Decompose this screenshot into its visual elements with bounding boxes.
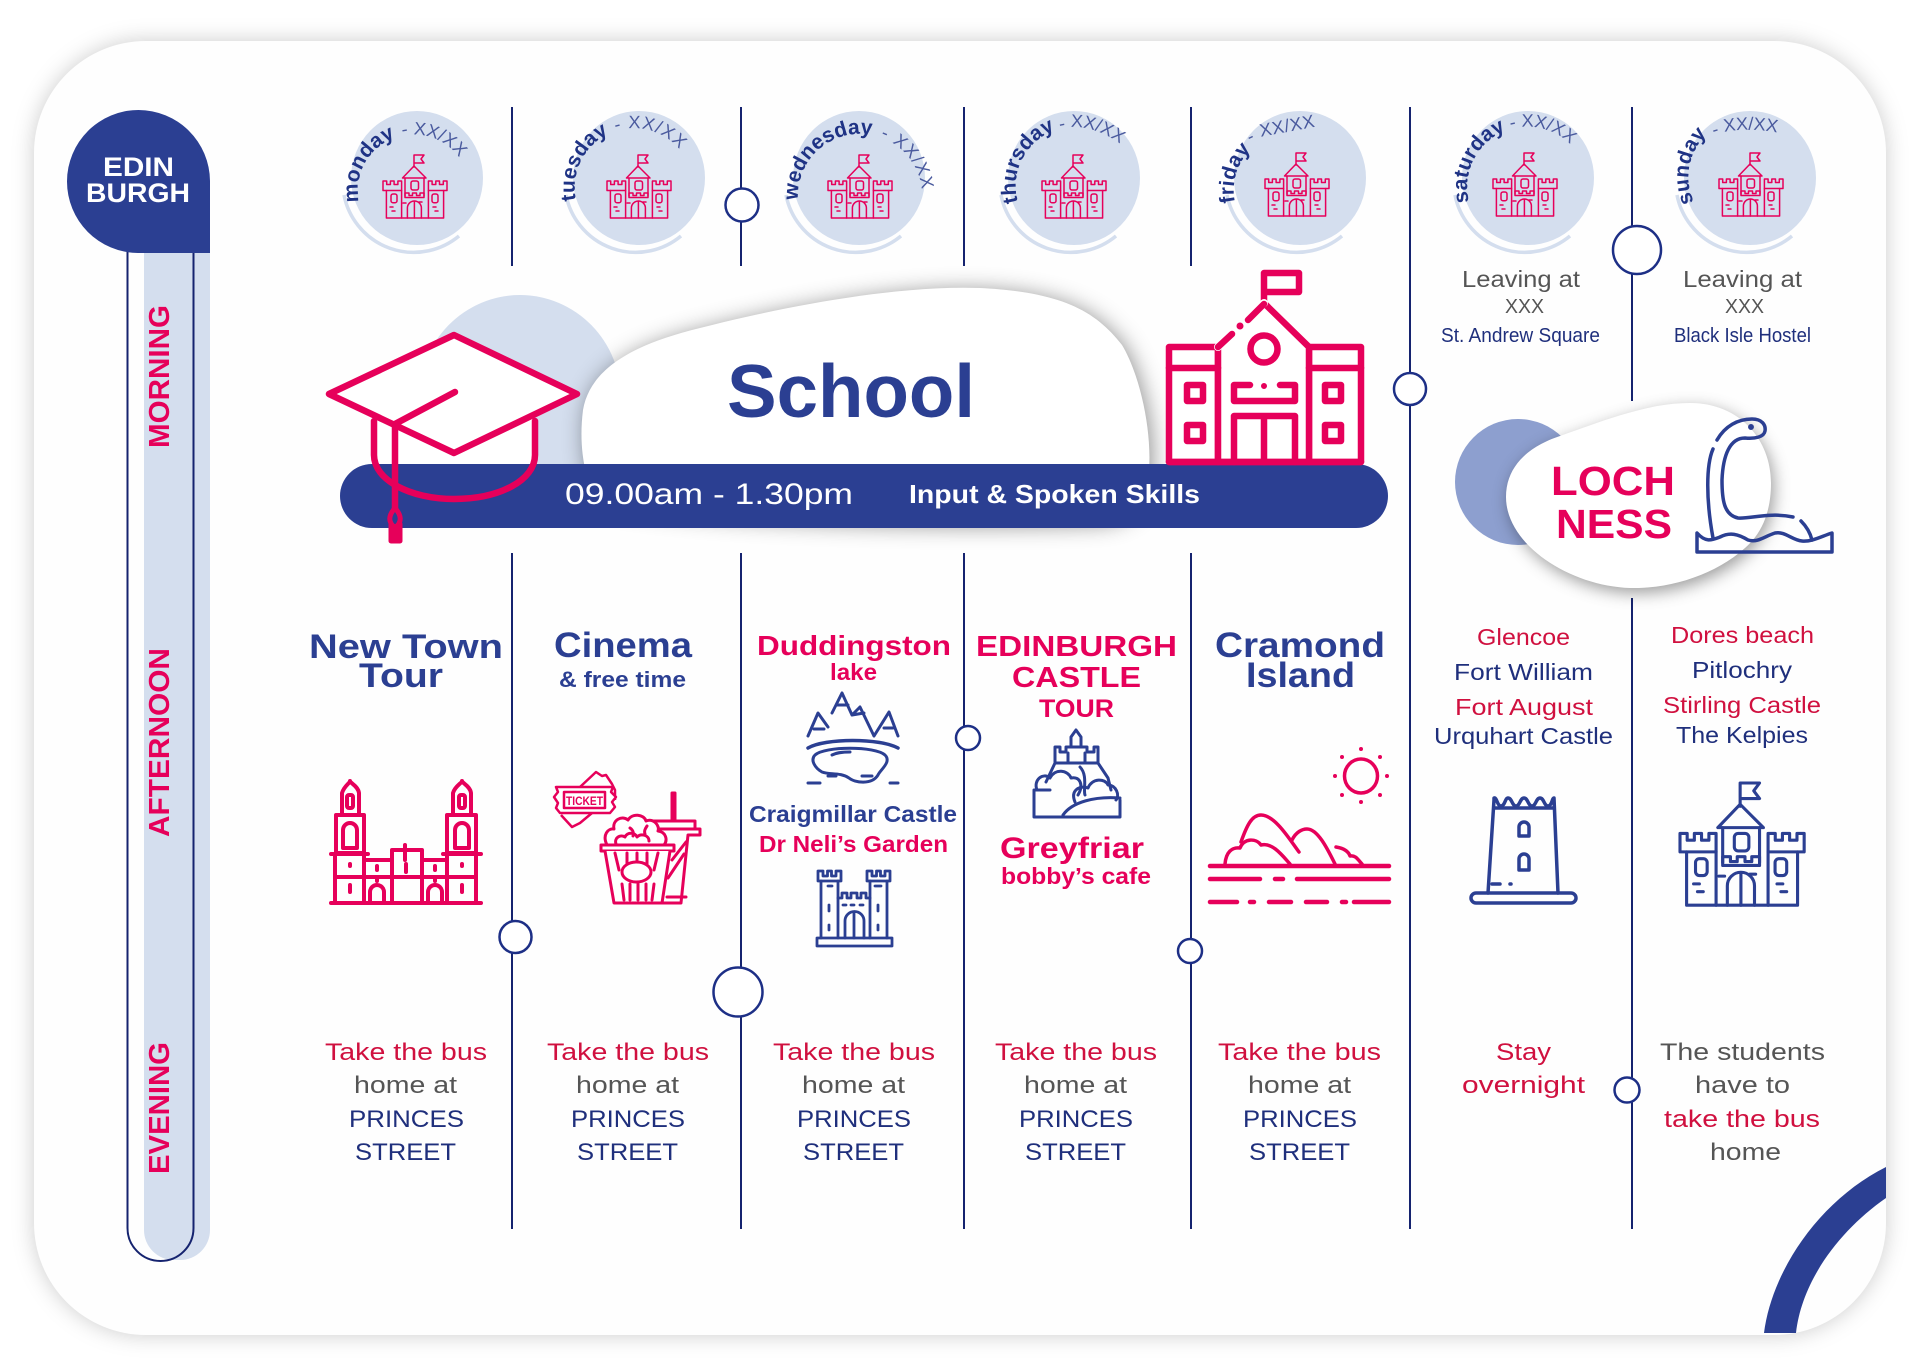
evening text: wednesday: [773, 1039, 935, 1166]
evening text: thursday: home at: [1024, 1072, 1127, 1099]
evening text: saturday: Stay: [1496, 1039, 1551, 1066]
school blob: [581, 288, 1149, 524]
day badge: wednesday: - XX/XX: [882, 132, 934, 189]
heading: Loch Ness: LOCH: [1551, 458, 1675, 504]
label: evening: EVENING: [144, 1042, 176, 1174]
day badge: sunday: [1675, 111, 1816, 254]
evening text: thursday: [995, 1039, 1157, 1166]
column: Edinburgh Castle: TOUR: [1039, 695, 1114, 723]
sunday departure text: [1674, 266, 1811, 347]
icon: island hills and water: [1210, 815, 1389, 902]
evening text: wednesday: PRINCES: [797, 1106, 911, 1133]
evening text: sunday: The students: [1660, 1039, 1825, 1066]
column: New Town Tour: New Town: [309, 628, 503, 666]
column: Edinburgh Castle: CASTLE: [1012, 662, 1141, 694]
column: New Town Tour: Tour: [359, 657, 443, 695]
icon: Nessie: [1697, 419, 1832, 552]
icon: castle: [1680, 783, 1804, 905]
column: Sunday destinations: [1663, 622, 1821, 905]
panel: Loch Ness: [1455, 403, 1832, 588]
city badge: Edinburgh: [67, 110, 210, 253]
column: Duddingston and Craigmillar: Duddingston: [757, 630, 951, 661]
evening text: saturday: [1462, 1039, 1585, 1099]
saturday departure text: St. Andrew Square: [1441, 325, 1600, 347]
icon: tickets: [554, 772, 616, 827]
column: Saturday destinations: [1434, 624, 1613, 903]
evening text: sunday: have to: [1695, 1072, 1790, 1099]
icon: graduation cap: [329, 335, 577, 541]
column: Sunday destinations: Pitlochry: [1692, 657, 1793, 683]
label: afternoon: AFTERNOON: [144, 648, 176, 837]
day badge: saturday: - XX/XX: [1510, 114, 1578, 144]
evening text: monday: PRINCES: [349, 1106, 464, 1133]
evening text: sunday: take the bus: [1664, 1106, 1820, 1133]
column: Cramond Island: Island: [1246, 656, 1355, 695]
timeline nodes: [500, 188, 1661, 1102]
evening text: wednesday: home at: [802, 1072, 905, 1099]
column: Saturday destinations: Fort William: [1454, 659, 1593, 685]
day badge: saturday: saturday: [1454, 120, 1502, 202]
sunday departure text: Leaving at: [1683, 266, 1803, 292]
column: Sunday destinations: Stirling Castle: [1663, 692, 1821, 718]
evening text: friday: PRINCES: [1243, 1106, 1357, 1133]
pale circle behind cap: [419, 295, 621, 501]
day badge: tuesday: tuesday: [562, 124, 606, 202]
column: Duddingston and Craigmillar: Dr Neli’s Garden: [759, 831, 948, 857]
evening text: monday: STREET: [355, 1139, 456, 1166]
column: Duddingston and Craigmillar: lake: [830, 659, 877, 685]
city badge: Edinburgh: BURGH: [86, 178, 190, 208]
evening text: friday: [1218, 1039, 1381, 1166]
column: Cinema: & free time: [559, 667, 686, 692]
evening text: tuesday: PRINCES: [571, 1106, 685, 1133]
evening text: thursday: Take the bus: [995, 1039, 1157, 1066]
day badge: monday: [342, 111, 483, 254]
day badge: thursday: [999, 111, 1140, 254]
column: Sunday destinations: Dores beach: [1671, 622, 1814, 648]
column divider lines: [512, 107, 1632, 1229]
evening text: sunday: home: [1710, 1139, 1781, 1166]
column: Saturday destinations: Fort August: [1455, 694, 1594, 720]
column: Cinema: Cinema: [554, 626, 693, 665]
icon: tickets: TICKET: [566, 794, 604, 808]
icon: tower: [1471, 798, 1576, 903]
evening text: tuesday: STREET: [577, 1139, 678, 1166]
saturday departure text: [1441, 266, 1600, 347]
day badge: tuesday: [562, 111, 705, 254]
column: Edinburgh Castle: bobby’s cafe: [1001, 863, 1151, 889]
evening text: tuesday: Take the bus: [547, 1039, 709, 1066]
evening text: thursday: STREET: [1025, 1139, 1126, 1166]
school bar: [340, 464, 1388, 528]
sunday departure text: Black Isle Hostel: [1674, 325, 1811, 347]
evening text: saturday: overnight: [1462, 1072, 1585, 1099]
label: morning: MORNING: [144, 305, 176, 448]
day badge: monday: monday: [346, 127, 392, 202]
evening text: friday: STREET: [1249, 1139, 1350, 1166]
evening text: sunday: [1660, 1039, 1825, 1166]
icon: castle on rock: [1034, 730, 1120, 817]
icon: school building: [1169, 273, 1361, 462]
evening text: thursday: PRINCES: [1019, 1106, 1133, 1133]
column: Saturday destinations: Urquhart Castle: [1434, 723, 1613, 749]
column: Cinema: [554, 626, 700, 903]
column: Duddingston and Craigmillar: Craigmillar Castle: [749, 801, 957, 827]
saturday departure text: Leaving at: [1462, 266, 1581, 292]
evening text: wednesday: Take the bus: [773, 1039, 935, 1066]
icon: cathedral: [331, 781, 481, 903]
school hours: 09.00am - 1.30pm: [565, 478, 853, 511]
city badge: Edinburgh: EDIN: [103, 152, 174, 182]
evening text: tuesday: home at: [576, 1072, 679, 1099]
icon: Craigmillar Castle: [817, 871, 892, 946]
day badge: sunday: sunday: [1677, 126, 1706, 204]
day badge: friday: - XX/XX: [1248, 114, 1315, 139]
day badge: wednesday: [784, 111, 934, 254]
column: Cramond Island: [1210, 626, 1389, 902]
day badge: wednesday: wednesday: [786, 120, 873, 200]
day badge: monday: - XX/XX: [402, 122, 468, 157]
day badge: friday: friday: [1218, 142, 1250, 204]
day badge: friday: [1218, 111, 1366, 254]
column: Cramond Island: Cramond: [1215, 626, 1385, 665]
evening text: monday: Take the bus: [325, 1039, 487, 1066]
icon: popcorn and drink: [601, 793, 700, 903]
day badge: tuesday: - XX/XX: [615, 116, 688, 149]
school subject: Input & Spoken Skills: [909, 479, 1200, 509]
day badge: saturday: [1453, 111, 1594, 254]
day badge: thursday: - XX/XX: [1060, 114, 1126, 144]
column: Edinburgh Castle: [976, 631, 1177, 889]
day badge: sunday: - XX/XX: [1713, 116, 1778, 132]
column: New Town Tour: [309, 628, 503, 903]
evening text: tuesday: [547, 1039, 709, 1166]
evening text: friday: Take the bus: [1218, 1039, 1381, 1066]
evening text: friday: home at: [1248, 1072, 1351, 1099]
sunday departure text: XXX: [1725, 296, 1764, 318]
cap inner white: [374, 400, 535, 500]
day badge: thursday: thursday: [1000, 120, 1052, 204]
time-of-day tube: [128, 240, 210, 1261]
saturday departure text: XXX: [1505, 296, 1544, 318]
heading: Loch Ness: NESS: [1556, 501, 1672, 547]
evening text: wednesday: STREET: [803, 1139, 904, 1166]
heading: Loch Ness: [1551, 458, 1675, 547]
column: Duddingston and Craigmillar: [749, 630, 957, 946]
icon: lake and mountains: [808, 693, 898, 783]
evening text: monday: home at: [354, 1072, 457, 1099]
heading: School: School: [727, 349, 975, 433]
column: Edinburgh Castle: EDINBURGH: [976, 631, 1177, 663]
icon: sun: [1333, 747, 1389, 804]
column: Sunday destinations: The Kelpies: [1676, 722, 1808, 748]
column: Saturday destinations: Glencoe: [1477, 624, 1570, 650]
evening text: monday: [325, 1039, 487, 1166]
corner arc: [1764, 1167, 1886, 1333]
column: Edinburgh Castle: Greyfriar: [1000, 832, 1144, 865]
